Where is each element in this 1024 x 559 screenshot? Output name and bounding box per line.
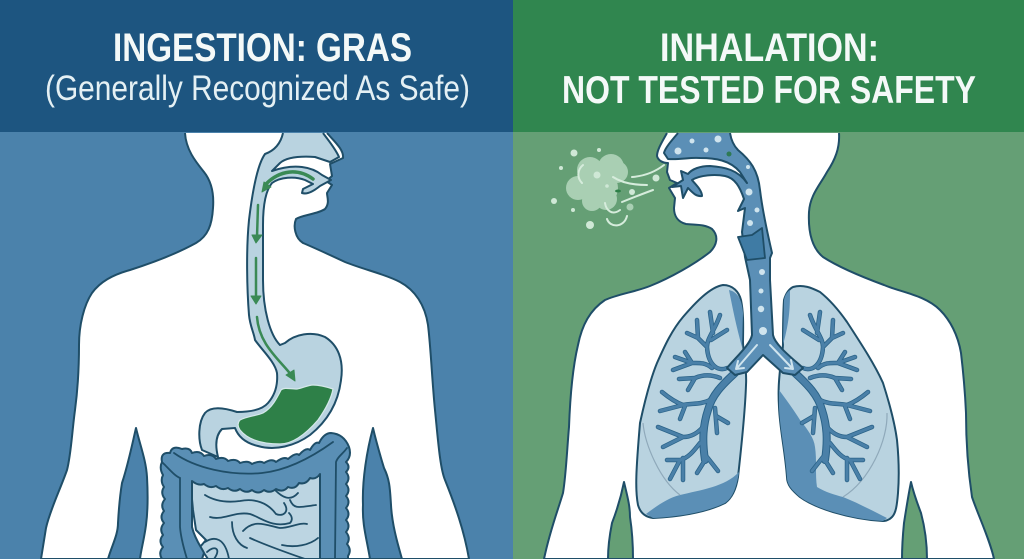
panel: inhalation [513, 0, 1024, 559]
panel background: blue [0, 0, 513, 559]
lungs [636, 285, 899, 521]
arm gap left [608, 482, 633, 559]
right lung [779, 286, 899, 521]
panel background: green [513, 0, 1024, 559]
arm gap left [108, 428, 148, 559]
header bar blue [0, 0, 513, 132]
small intestine [190, 470, 324, 559]
subheading: GRAS meaning: (Generally Recognized As Safe) [45, 69, 470, 108]
large intestine [160, 433, 350, 559]
arm gap right [363, 428, 402, 559]
airway: nasal passage, throat and trachea [664, 133, 803, 375]
inhaled particles in airway [674, 136, 767, 335]
smoke cloud with particles [551, 148, 664, 229]
header bar green [513, 0, 1024, 132]
body silhouette: inhalation [544, 133, 994, 559]
airflow arrows into lungs [736, 345, 793, 369]
stomach liquid [238, 385, 333, 444]
panel: ingestion [0, 0, 513, 559]
body silhouette: ingestion [41, 133, 469, 559]
left lung [636, 285, 746, 518]
heading: inhalation: INHALATION: [660, 26, 879, 70]
larynx [738, 228, 765, 260]
bronchial tree [658, 312, 872, 480]
header: ingestion [0, 0, 513, 132]
green arrows: swallowing path [251, 172, 313, 381]
header: inhalation [513, 0, 1024, 132]
heading: ingestion: INGESTION: GRAS [113, 26, 412, 70]
digestive tract: mouth, esophagus and stomach [199, 133, 342, 457]
arm gap right [902, 482, 927, 559]
